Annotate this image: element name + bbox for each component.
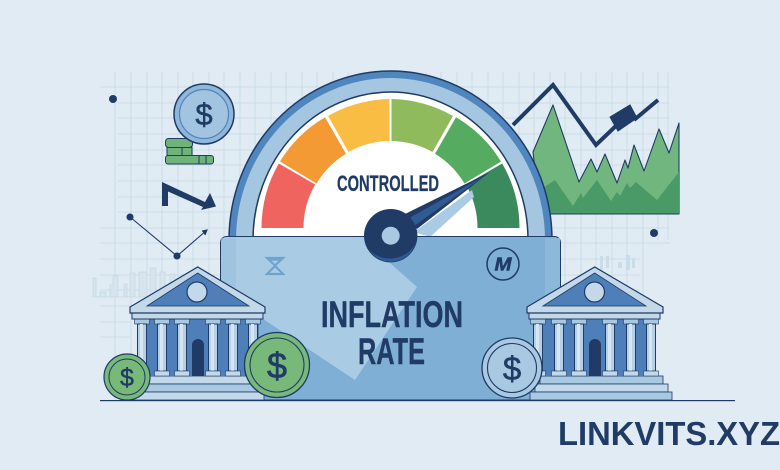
dollar coin [174,84,234,144]
coin: blue: $ [503,350,521,387]
panel right strip [545,238,560,399]
line chart small [127,214,207,259]
steps [530,376,672,400]
arrow: seven shape [162,182,216,210]
needle shadow [414,190,474,237]
hub [364,209,417,262]
icon: hourglass [267,258,283,274]
columns [530,319,658,376]
roof [527,267,663,313]
icon: m coin [487,248,519,280]
bank left [130,267,265,400]
zigzag trend line with arrow [513,85,658,145]
coin stack [166,84,234,164]
pediment [147,273,249,306]
panel left strip [221,238,236,338]
main panel [220,236,560,400]
coin: blue [482,338,542,398]
coin: small green: $ [120,364,134,392]
panel title: INFLATION [321,294,463,335]
panel body [220,236,560,400]
gauge outer rim [229,71,552,240]
segment: green [435,117,501,184]
green area chart [533,105,679,214]
faint bar chart left [93,268,175,297]
faint bar chart right [600,255,635,270]
gauge inner rim [236,78,545,240]
ground line [100,400,735,401]
decorative dot top left [109,95,117,103]
back wall [534,319,656,376]
back wall [137,319,259,376]
pediment [543,273,646,306]
coin: small green [104,354,150,400]
needle [405,172,490,229]
segment: orange [280,117,346,184]
needle highlight [402,175,486,226]
icon: m coin: M [494,254,513,274]
columns [134,319,260,376]
panel title: RATE [358,331,425,372]
coin stack: $ [195,97,213,132]
pediment circle [584,282,604,302]
gauge needle and hub [364,172,490,262]
pediment circle [187,282,207,302]
light area [533,105,679,214]
roof [130,267,265,313]
gauge [229,71,552,240]
panel light facet [221,237,417,380]
door [589,339,601,376]
beam [529,313,660,319]
segment: yellow [328,99,390,152]
gauge label: CONTROLLED [337,171,439,196]
coin: large green: $ [267,345,287,386]
steps [132,376,264,400]
decorative dot right [650,229,658,237]
door [192,339,204,376]
panel title [321,294,463,372]
segment: light green [392,99,453,152]
watermark: LINKVITS.XYZ [558,415,780,452]
segment: dark green [466,164,520,228]
dark area [540,172,679,214]
gauge dial face [253,92,528,240]
segment: red [262,164,315,228]
coin: large green [244,332,310,398]
bank right [527,267,672,400]
green bills [166,138,214,164]
beam [132,313,263,319]
